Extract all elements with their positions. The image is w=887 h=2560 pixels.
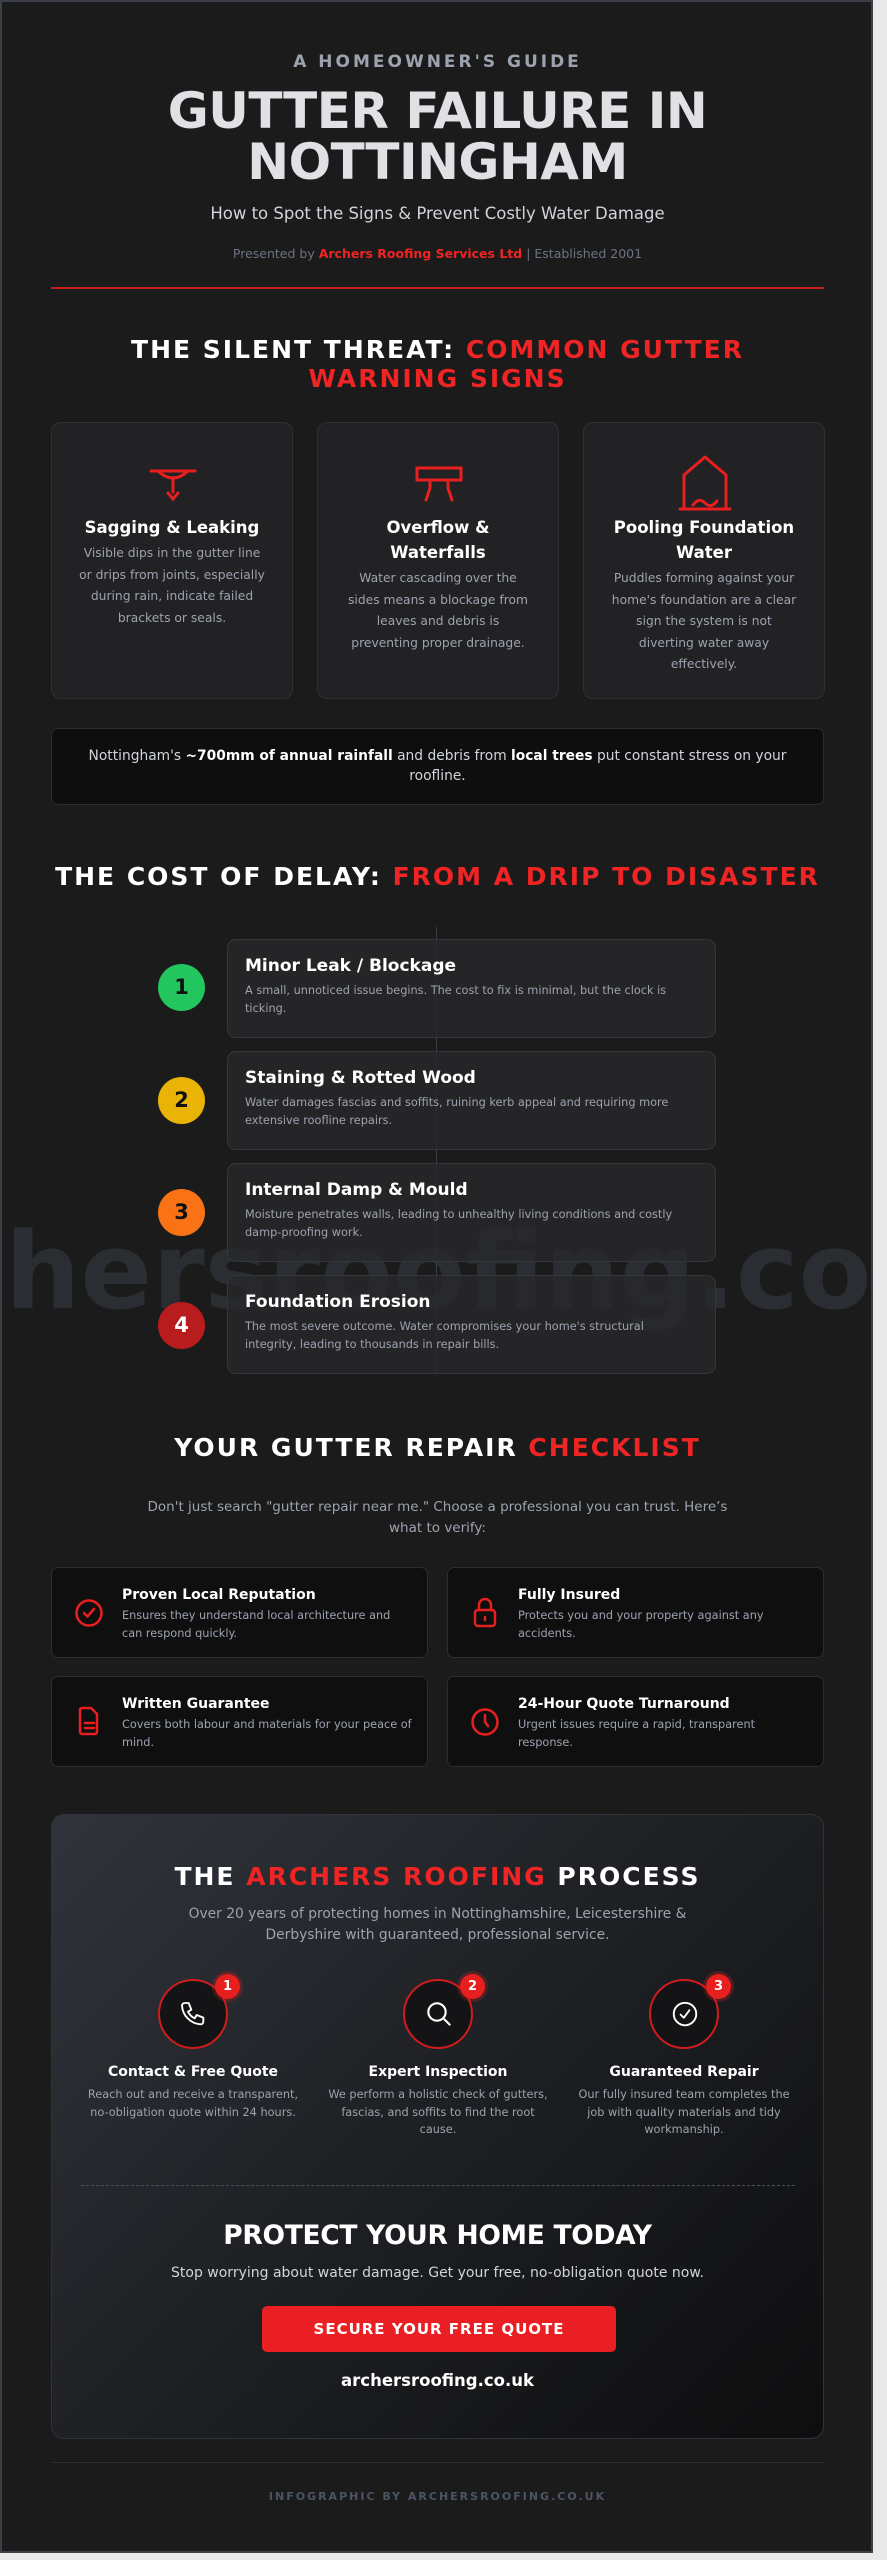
badge 1: 1 [174, 975, 189, 999]
icon: lock [474, 1598, 496, 1628]
CTA subtext: Stop worrying about water damage. Get your free, no-obligation quote now. [171, 2265, 704, 2281]
footer: INFOGRAPHIC BY ARCHERSROOFING.CO.UK [269, 2490, 606, 2503]
checklist: fully insured: Protects you and your property against any accidents. [518, 1609, 764, 1640]
eyebrow: A HOMEOWNER'S GUIDE: A HOMEOWNER'S GUIDE [293, 52, 582, 72]
panel: process & CTA [51, 1814, 824, 2439]
badge 4 [158, 1302, 205, 1349]
card: damp [227, 1163, 716, 1262]
badge 1 [158, 964, 205, 1011]
checklist: proven local reputation: Ensures they understand local architecture and can respond quickly. [122, 1609, 390, 1640]
icon: check circle [75, 1599, 103, 1627]
panel: overflow & waterfalls [317, 422, 559, 699]
step 2: inspection: 2 [468, 1979, 477, 1994]
icon: magnifier [403, 1979, 473, 2049]
step 1: contact: Contact & Free Quote [108, 2064, 278, 2080]
step 3: repair [578, 1971, 790, 2136]
card: foundation erosion: The most severe outcome. Water compromises your home's structural integrity, leading to thousands in repair bills. [245, 1320, 644, 1351]
step 3: repair: Our fully insured team completes the job with quality materials and tidy workmanship. [578, 2088, 790, 2136]
subtitle: How to Spot the Signs & Prevent Costly Water Damage [210, 204, 665, 223]
title: GUTTER FAILURE IN [168, 82, 707, 140]
title: Pooling Foundation [614, 518, 794, 537]
title: Overflow & [386, 518, 490, 537]
badge 3 [158, 1189, 205, 1236]
checklist: proven local reputation: Proven Local Reputation [122, 1587, 316, 1603]
title [168, 82, 707, 191]
card: foundation erosion [227, 1275, 716, 1374]
heading: silent threat: WARNING SIGNS [308, 364, 567, 393]
checklist: written guarantee: Covers both labour and materials for your peace of mind. [122, 1718, 412, 1748]
card: staining: Water damages fascias and soffits, ruining kerb appeal and requiring more extensive roofline repairs. [245, 1096, 668, 1127]
title [614, 518, 794, 562]
card: staining [227, 1051, 716, 1150]
button: secure quote [262, 2306, 616, 2352]
heading: silent threat [131, 335, 744, 393]
title: Sagging & Leaking [85, 518, 259, 537]
icon: check [649, 1979, 719, 2049]
title: Waterfalls [390, 543, 486, 562]
step 1: contact: 1 [223, 1979, 232, 1994]
panel: sagging & leaking [51, 422, 293, 699]
step 2: inspection [328, 1971, 548, 2136]
step 3: repair: Guaranteed Repair [609, 2064, 759, 2080]
presented by: Presented by Archers Roofing Services Ltd | Established 2001 [233, 246, 642, 261]
icon: overflow [416, 466, 462, 502]
heading: protect your home: PROTECT YOUR HOME TODAY [223, 2220, 652, 2251]
card: damp: Moisture penetrates walls, leading to unhealthy living conditions and costly damp-proofing work. [245, 1208, 672, 1239]
card: minor leak [227, 939, 716, 1038]
description: Visible dips in the gutter line or drips from joints, especially during rain, indicate failed brackets or seals. [79, 546, 265, 624]
callout: rainfall: Nottingham's ~700mm of annual rainfall and debris from local trees put constant stress on your roofline. [89, 748, 786, 784]
checklist: 24-hour quote [447, 1676, 824, 1767]
step 3: repair: 3 [714, 1979, 723, 1994]
title: Water [676, 543, 732, 562]
title [386, 518, 490, 562]
step 2: inspection: Expert Inspection [368, 2064, 507, 2080]
card: damp: Internal Damp & Mould [245, 1180, 468, 1200]
step 2: inspection: We perform a holistic check of gutters, fascias, and soffits to find the root cause. [328, 2088, 548, 2136]
badge 3: 3 [174, 1200, 189, 1224]
heading: archers process: THE ARCHERS ROOFING PROCESS [174, 1862, 701, 1891]
checklist: written guarantee [51, 1676, 428, 1767]
heading: cost of delay: THE COST OF DELAY: FROM A DRIP TO DISASTER [55, 862, 820, 891]
heading: checklist: YOUR GUTTER REPAIR CHECKLIST [174, 1433, 701, 1462]
icon: sagging gutter [150, 469, 196, 502]
checklist: 24-hour quote: 24-Hour Quote Turnaround [518, 1696, 730, 1712]
description: Puddles forming against your home's foundation are a clear sign the system is not diverting water away effectively. [612, 571, 796, 671]
timeline line [436, 927, 437, 1374]
icon: phone [158, 1979, 228, 2049]
process subtext: Over 20 years of protecting homes in Nottinghamshire, Leicestershire & Derbyshire with guaranteed, professional service. [189, 1906, 686, 1943]
checklist: proven local reputation [51, 1567, 428, 1658]
badge 2: 2 [174, 1088, 189, 1112]
panel: pooling foundation water [583, 422, 825, 699]
icon: clock [471, 1708, 499, 1736]
card: minor leak: Minor Leak / Blockage [245, 956, 456, 976]
badge 4: 4 [174, 1313, 189, 1337]
icon: house with water [678, 456, 732, 510]
button: secure quote: SECURE YOUR FREE QUOTE [314, 2320, 564, 2338]
checklist intro: Don't just search "gutter repair near me." Choose a professional you can trust. Here’s what to verify: [148, 1499, 727, 1536]
checklist: written guarantee: Written Guarantee [122, 1696, 270, 1712]
card: foundation erosion: Foundation Erosion [245, 1292, 431, 1312]
checklist: fully insured [447, 1567, 824, 1658]
url: archersroofing.co.uk [341, 2371, 534, 2390]
callout: rainfall [51, 728, 824, 805]
heading: silent threat: THE SILENT THREAT: COMMON GUTTER [131, 335, 744, 364]
badge 2 [158, 1077, 205, 1124]
step 1: contact [88, 1971, 298, 2118]
card: staining: Staining & Rotted Wood [245, 1068, 476, 1088]
icon: document [78, 1706, 98, 1736]
checklist: fully insured: Fully Insured [518, 1587, 620, 1603]
checklist: 24-hour quote: Urgent issues require a rapid, transparent response. [518, 1718, 755, 1748]
card: minor leak: A small, unnoticed issue begins. The cost to fix is minimal, but the clock is ticking. [245, 984, 666, 1015]
step 1: contact: Reach out and receive a transparent, no-obligation quote within 24 hours. [88, 2088, 298, 2118]
title: NOTTINGHAM [247, 133, 628, 191]
description: Water cascading over the sides means a blockage from leaves and debris is preventing proper drainage. [348, 571, 528, 650]
